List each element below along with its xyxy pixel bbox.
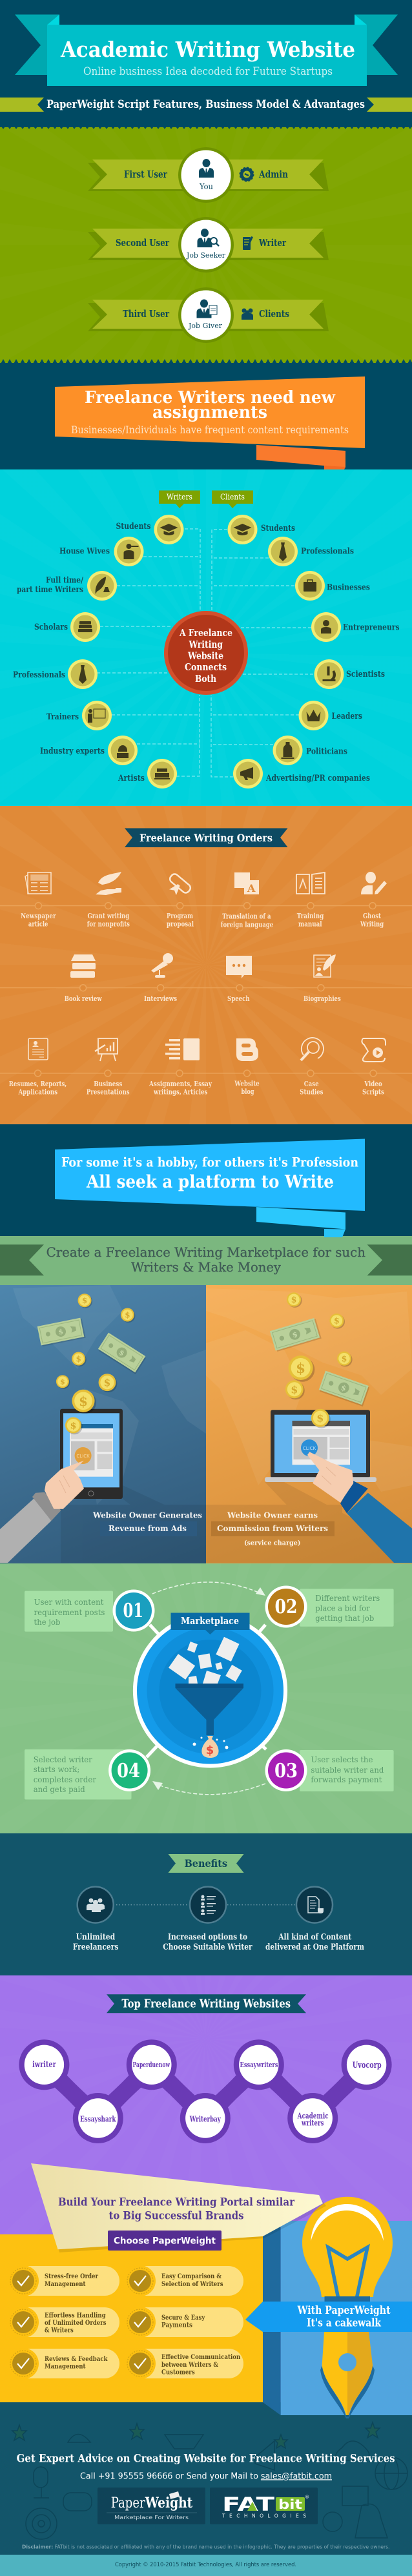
- user row: second user: Second User: [116, 238, 169, 249]
- writers: industry experts: Industry experts: [40, 747, 105, 756]
- order: newspaper article: [21, 872, 56, 929]
- coins left: $: [76, 1355, 81, 1364]
- feature: reviews and feedback: Management: [45, 2363, 86, 2371]
- feature: easy comparison and selection: Easy Comparison &: [161, 2272, 221, 2280]
- feature: secure and easy payments: Payments: [161, 2322, 192, 2329]
- feature: stress-free order management: Management: [45, 2280, 86, 2288]
- clients: entrepreneurs: [311, 612, 399, 642]
- order: translation of a foreign language: [221, 872, 273, 929]
- orange ribbon: freelance writers need new assignments: [55, 376, 365, 469]
- step 03 number: 03: [274, 1760, 298, 1782]
- center circle: a freelance writing website connects both: A Freelance: [179, 628, 232, 639]
- websites chain: Writerbay: [189, 2115, 221, 2124]
- order: video scripts: [362, 1038, 386, 1097]
- clients: entrepreneurs: Entrepreneurs: [343, 623, 399, 633]
- benefit: all kind of content: delivered at One Platform: [265, 1942, 364, 1952]
- step panel 04: and gets paid: [34, 1784, 85, 1794]
- clients: students: Students: [261, 524, 295, 533]
- step 04 number: 04: [117, 1760, 140, 1782]
- blue ribbon: hobby and profession: All seek a platform to Write: [86, 1172, 334, 1192]
- bills left and right: $: [291, 1330, 298, 1339]
- logo: fatbit technologies: TECHNOLOGIES: [221, 2513, 306, 2519]
- center circle: a freelance writing website connects both: Website: [187, 651, 223, 661]
- user row: second user: [88, 217, 329, 273]
- websites chain: Academic: [297, 2112, 329, 2121]
- icon: admin gear: [240, 168, 253, 181]
- callout: build your freelance writing portal: to Big Successful Brands: [108, 2210, 244, 2223]
- step 01 number: [112, 1590, 155, 1631]
- center circle: a freelance writing website connects both: Connects: [185, 662, 227, 673]
- benefits dotted connectors: [116, 1904, 296, 1906]
- step panel 04: Selected writer: [34, 1755, 92, 1764]
- footer call to action: [17, 2453, 395, 2481]
- feature: easy comparison and selection: Selection of Writers: [161, 2280, 223, 2288]
- panel: blue side with pen: [263, 2221, 412, 2415]
- tag: marketplace: Marketplace: [181, 1616, 239, 1627]
- feature: effective communication: Effective Communication: [161, 2353, 241, 2361]
- feature: effective communication: Customers: [161, 2369, 195, 2376]
- callout: build your freelance writing portal: Build Your Freelance Writing Portal similar: [58, 2196, 295, 2209]
- panel: process background: [0, 1563, 412, 1833]
- user row: second user: Job Seeker: [186, 251, 225, 260]
- user row: first user: You: [199, 182, 213, 191]
- caption: commission from writers: [211, 1510, 335, 1547]
- logo: paperweight: Paper: [111, 2495, 145, 2511]
- caption: revenue from ads: Website Owner Generates: [92, 1510, 202, 1520]
- panel: users background: [0, 127, 412, 363]
- websites chain: Uvocorp: [353, 2061, 382, 2070]
- feature: effortless handling: of Unlimited Orders: [45, 2319, 107, 2327]
- order: ghost writing: Writing: [360, 920, 384, 929]
- coins left: $: [125, 1311, 130, 1320]
- tag: clients: [212, 491, 253, 508]
- illustration: tablet with ad click: [60, 1409, 123, 1499]
- user row: third user: Third User: [123, 309, 169, 320]
- step panel 01: requirement posts: [34, 1607, 105, 1617]
- panel: copyright strip background: [0, 2555, 412, 2576]
- step 03 number: [265, 1749, 307, 1791]
- order: case studies: Case: [304, 1079, 319, 1088]
- user row: first user: Admin: [258, 169, 288, 180]
- step panel 04: [25, 1749, 132, 1799]
- paper sheets: [169, 1637, 242, 1684]
- panel: footer background: [0, 2402, 412, 2555]
- order: training manual: manual: [298, 920, 322, 929]
- step panel 01: the job: [34, 1617, 61, 1627]
- footer doodle pattern: [12, 2422, 407, 2539]
- coins right: $: [296, 1361, 305, 1377]
- panel: hobby ribbon background: [0, 1124, 412, 1236]
- illustration: hand on tablet: [0, 1461, 84, 1563]
- coins right: [285, 1292, 353, 1428]
- logo: paperweight: Weight: [145, 2495, 193, 2511]
- panel: writers and clients background: [0, 469, 412, 806]
- step panel 02: getting that job: [315, 1613, 374, 1623]
- connectors to marketplace circle: [147, 1625, 266, 1757]
- order: newspaper article: Newspaper: [21, 911, 56, 920]
- writers: full time / part time writers: [17, 571, 117, 601]
- disclaimer: Disclaimer: FATbit is not associated or affiliated with any of the brand name used in the infographic. They are properties of their respective owners.: [22, 2544, 390, 2550]
- clients: politicians: Politicians: [306, 747, 347, 757]
- websites chain: writers: [301, 2119, 324, 2128]
- writers: full time / part time writers: Full time/: [46, 576, 83, 585]
- title ribbon: [15, 14, 398, 86]
- feature: effortless handling: [8, 2307, 119, 2338]
- heading: top freelance writing websites: [107, 1994, 306, 2013]
- coins left: $: [70, 1421, 76, 1431]
- user row: first user: First User: [124, 169, 167, 180]
- subtitle band: PaperWeight Script Features, Business Model & Advantages: [46, 98, 365, 111]
- subtitle: Online business Idea decoded for Future Startups: [83, 65, 333, 78]
- money bag: [192, 1736, 229, 1758]
- order: resumes, reports, applications: [9, 1038, 67, 1097]
- writers: scholars: Scholars: [34, 623, 68, 632]
- order: interviews: Interviews: [144, 994, 177, 1003]
- arrow: step 01 to 02: [152, 1582, 265, 1596]
- caption: revenue from ads: Revenue from Ads: [108, 1523, 187, 1533]
- step panel 01: [25, 1591, 113, 1632]
- panel: revenue from ads background: [0, 1285, 206, 1563]
- order: biographies: [304, 954, 341, 1003]
- feature: stress-free order management: [8, 2265, 119, 2296]
- caption: commission from writers: (service charge): [244, 1539, 301, 1547]
- heading: freelance writing orders: [125, 828, 288, 847]
- writers: house wives: [59, 537, 143, 566]
- user row: first user: [88, 147, 329, 203]
- step 02 number: [265, 1586, 307, 1627]
- order: resumes, reports, applications: Resumes, Reports,: [9, 1079, 67, 1088]
- benefit: increased options: Increased options to: [168, 1932, 247, 1942]
- tag: writers: [159, 491, 200, 508]
- order: business presentations: Business: [94, 1079, 122, 1088]
- benefit: increased options: [163, 1887, 252, 1952]
- icon: pen nib: [320, 2332, 375, 2418]
- feature: effortless handling: & Writers: [45, 2327, 74, 2334]
- order: book review: Book review: [65, 994, 103, 1003]
- benefit: unlimited freelancers: [73, 1887, 119, 1952]
- user row: third user: Job Giver: [188, 321, 222, 330]
- order: grant writing for nonprofits: for nonprofits: [87, 920, 130, 929]
- coins right: $: [291, 1383, 298, 1396]
- panel: benefits background: [0, 1833, 412, 1975]
- arrow: step 03 to 04: [152, 1781, 265, 1795]
- callout: with paperweight it's a cakewalk: [245, 2302, 412, 2332]
- writers: trainers: [46, 701, 112, 730]
- bills left and right: $: [340, 1383, 347, 1393]
- logo: fatbit technologies: FAT: [222, 2493, 274, 2515]
- panel: freelance ribbon background: [0, 363, 412, 469]
- coins left: $: [82, 1296, 87, 1305]
- benefit: all kind of content: [265, 1887, 364, 1952]
- order: assignments, essay writings, articles: [149, 1038, 212, 1097]
- order: video scripts: Scripts: [362, 1087, 384, 1097]
- order: grant writing for nonprofits: [87, 872, 130, 929]
- copyright: Copyright © 2010-2015 Fatbit Technologies, All rights are reserved.: [115, 2562, 296, 2568]
- orange ribbon: freelance writers need new assignments: Businesses/Individuals have frequent content requirements: [71, 424, 349, 436]
- clients: scientists: [314, 659, 385, 689]
- order: assignments, essay writings, articles: Assignments, Essay: [149, 1079, 212, 1088]
- step panel 02: Different writers: [315, 1593, 380, 1603]
- step panel 01: User with content: [34, 1597, 103, 1607]
- logo: fatbit technologies: ®: [305, 2495, 309, 2500]
- feature: secure and easy payments: [125, 2307, 243, 2338]
- coins right: $: [316, 1412, 324, 1425]
- feature: reviews and feedback: [8, 2348, 119, 2379]
- writers: house wives: House Wives: [59, 546, 110, 557]
- tag: writers: Writers: [167, 492, 192, 501]
- illustration: tablet with ad click: CLICK: [76, 1454, 90, 1459]
- marketplace funnel diagram: [133, 1613, 287, 1768]
- user row: third user: Clients: [259, 309, 289, 320]
- feature: secure and easy payments: Secure & Easy: [161, 2314, 205, 2322]
- zigzag edge bottom of users section: [0, 359, 412, 365]
- center circle: a freelance writing website connects both: [164, 611, 248, 695]
- coins left: [56, 1293, 135, 1434]
- clients: advertising and PR companies: Advertising/PR companies: [265, 774, 370, 783]
- order: book review: [65, 954, 103, 1003]
- step 04 number: [108, 1749, 150, 1791]
- clients: advertising and PR companies: [233, 759, 370, 788]
- callout: build your freelance writing portal: [31, 2163, 326, 2252]
- clients: politicians: [273, 736, 347, 765]
- writers: full time / part time writers: part time Writers: [17, 585, 83, 595]
- order: interviews: [144, 953, 177, 1003]
- clients: leaders: [298, 701, 362, 730]
- step panel 02: [300, 1589, 394, 1627]
- writers: artists: Artists: [118, 774, 145, 783]
- coins right: $: [334, 1316, 340, 1326]
- blue ribbon: hobby and profession: For some it's a hobby, for others it's Profession: [61, 1155, 358, 1170]
- clients: students: [227, 515, 295, 544]
- order: ghost writing: [360, 872, 387, 929]
- order: business presentations: Presentations: [87, 1087, 130, 1097]
- order: translation of a foreign language: Translation of a: [222, 912, 271, 921]
- button: choose paperweight: Choose PaperWeight: [114, 2236, 216, 2246]
- order: case studies: [300, 1038, 324, 1097]
- feature: reviews and feedback: Reviews & Feedback: [45, 2355, 108, 2363]
- world map shapes: [13, 1285, 412, 1505]
- panel: features yellow area: [0, 2234, 263, 2402]
- benefit: unlimited freelancers: Freelancers: [73, 1942, 119, 1952]
- clients: businesses: [295, 571, 370, 601]
- marketplace heading band: Writers & Make Money: [131, 1259, 282, 1275]
- order: resumes, reports, applications: Applications: [18, 1087, 57, 1097]
- order: translation of a foreign language: A: [247, 882, 256, 894]
- order: business presentations: [87, 1038, 130, 1097]
- logo: paperweight: [98, 2488, 205, 2524]
- marketplace heading band: [0, 1244, 412, 1275]
- funnel: [176, 1684, 243, 1735]
- heading: top freelance writing websites: Top Freelance Writing Websites: [121, 1997, 291, 2010]
- panel: commission background: [206, 1285, 412, 1563]
- order: newspaper article: article: [28, 920, 48, 929]
- writers: artists: [118, 759, 177, 788]
- websites chain: [19, 2039, 392, 2143]
- writers: professionals: Professionals: [13, 670, 65, 680]
- order rows timeline: [0, 903, 412, 1077]
- heading: benefits: Benefits: [185, 1857, 227, 1870]
- logo: fatbit technologies: bit: [278, 2497, 303, 2512]
- order: speech: [226, 956, 252, 1003]
- step 02 number: 02: [275, 1596, 297, 1618]
- icon: job giver: [196, 300, 217, 318]
- bills left and right: $: [118, 1348, 126, 1357]
- illustration: laptop with commission click: CLICK: [303, 1446, 316, 1451]
- feature: stress-free order management: Stress-free Order: [45, 2272, 98, 2280]
- order: ghost writing: Ghost: [363, 911, 382, 920]
- order: website blog: Website: [234, 1078, 260, 1087]
- writers: students: [116, 515, 183, 544]
- user row: second user: Writer: [258, 238, 286, 249]
- step panel 04: completes order: [34, 1775, 96, 1784]
- icon: job seeker: [198, 229, 219, 247]
- feature: easy comparison and selection: [125, 2265, 243, 2296]
- coins right: $: [291, 1295, 296, 1304]
- center circle: a freelance writing website connects both: Writing: [189, 639, 223, 650]
- step panel 03: suitable writer and: [311, 1765, 384, 1775]
- step panel 03: User selects the: [311, 1755, 373, 1764]
- logo: paperweight: Marketplace For Writers: [114, 2515, 189, 2520]
- clients: professionals: [268, 537, 354, 566]
- coins left: $: [104, 1377, 110, 1388]
- step 01 number: 01: [123, 1600, 143, 1622]
- blue ribbon: hobby and profession: [55, 1139, 365, 1237]
- order: program proposal: [164, 872, 194, 929]
- clients: leaders: Leaders: [332, 712, 362, 721]
- user row: third user: [88, 287, 329, 343]
- money bag: $: [206, 1744, 214, 1757]
- writers: professionals: [13, 659, 98, 689]
- feature: effortless handling: Effortless Handling: [45, 2312, 106, 2320]
- coins right: $: [342, 1354, 347, 1363]
- order: case studies: Studies: [300, 1087, 323, 1097]
- websites chain: Essayshark: [80, 2115, 116, 2124]
- feature: effective communication: between Writers &: [161, 2361, 218, 2369]
- step panel 02: place a bid for: [315, 1603, 370, 1613]
- order: video scripts: Video: [364, 1079, 382, 1088]
- coins left: $: [60, 1377, 65, 1386]
- panel: header background: [0, 0, 412, 127]
- clients: professionals: Professionals: [301, 546, 354, 557]
- icon: clients: [242, 309, 253, 320]
- order: website blog: blog: [242, 1087, 254, 1096]
- center circle: a freelance writing website connects both: Both: [195, 674, 216, 685]
- websites chain: Essaywriters: [240, 2060, 278, 2069]
- caption: commission from writers: Website Owner earns: [227, 1510, 318, 1520]
- logo: fatbit technologies: [210, 2488, 318, 2524]
- title: Academic Writing Website: [60, 37, 355, 62]
- zigzag edge top of users section: [0, 125, 412, 129]
- benefit: increased options: Choose Suitable Writer: [163, 1942, 252, 1952]
- dashed connector lines: [97, 529, 314, 777]
- panel: marketplace heading band: [0, 1236, 412, 1285]
- step panel 03: [300, 1750, 394, 1791]
- illustration: laptop with commission click: [265, 1410, 376, 1482]
- bills left and right: [37, 1317, 370, 1406]
- clients: scientists: Scientists: [346, 670, 385, 679]
- icon: light bulb: [302, 2197, 393, 2302]
- long shadows of hands and devices: [61, 1482, 412, 1563]
- marketplace heading band: Create a Freelance Writing Marketplace for such: [46, 1244, 366, 1260]
- caption: revenue from ads: [92, 1510, 202, 1536]
- panel: orders background: [0, 806, 412, 1124]
- order: biographies: Biographies: [304, 994, 341, 1003]
- icon: writer: [243, 236, 253, 250]
- writers: industry experts: [40, 736, 138, 765]
- contact line: Call +91 95555 96666 or Send your Mail to sales@fatbit.com: [80, 2471, 332, 2481]
- benefit: unlimited freelancers: Unlimited: [76, 1932, 115, 1942]
- caption: commission from writers: Commission from Writers: [217, 1523, 328, 1533]
- illustration: hand on laptop: [307, 1452, 412, 1563]
- order: training manual: Training: [297, 911, 324, 920]
- order: assignments, essay writings, articles: writings, Articles: [153, 1087, 207, 1097]
- step panel 03: forwards payment: [311, 1775, 382, 1784]
- tag: marketplace: [170, 1613, 249, 1634]
- feature: effective communication: [125, 2348, 243, 2379]
- tag: clients: Clients: [220, 492, 245, 501]
- heading: freelance writing orders: Freelance Writing Orders: [139, 832, 273, 844]
- benefit: all kind of content: All kind of Content: [278, 1932, 351, 1942]
- callout: with paperweight it's a cakewalk: With PaperWeight: [297, 2304, 391, 2316]
- websites chain: Paperduenow: [133, 2060, 170, 2069]
- orange ribbon: freelance writers need new assignments: assignments: [152, 403, 267, 422]
- writers: trainers: Trainers: [46, 712, 79, 722]
- panel: top websites background: [0, 1975, 412, 2402]
- coins left: $: [79, 1394, 88, 1409]
- button: choose paperweight: [108, 2231, 221, 2251]
- order: program proposal: Program: [167, 911, 193, 920]
- writers: scholars: [34, 612, 100, 642]
- order: training manual: [296, 872, 325, 929]
- order: speech: Speech: [227, 994, 250, 1003]
- order: translation of a foreign language: foreign language: [221, 920, 273, 929]
- orange ribbon: freelance writers need new assignments: Freelance Writers need new: [85, 388, 336, 407]
- bills left and right: $: [57, 1327, 64, 1337]
- heading: benefits: [168, 1854, 244, 1873]
- writers: students: Students: [116, 522, 151, 531]
- order: program proposal: proposal: [167, 920, 194, 929]
- order: grant writing for nonprofits: Grant writing: [88, 911, 129, 920]
- order: website blog: [234, 1038, 260, 1096]
- icon: you: [199, 159, 214, 178]
- websites chain: iwriter: [32, 2060, 56, 2070]
- clients: businesses: Businesses: [327, 582, 370, 593]
- step panel 04: starts work;: [34, 1764, 79, 1774]
- callout: with paperweight it's a cakewalk: It's a cakewalk: [307, 2317, 381, 2329]
